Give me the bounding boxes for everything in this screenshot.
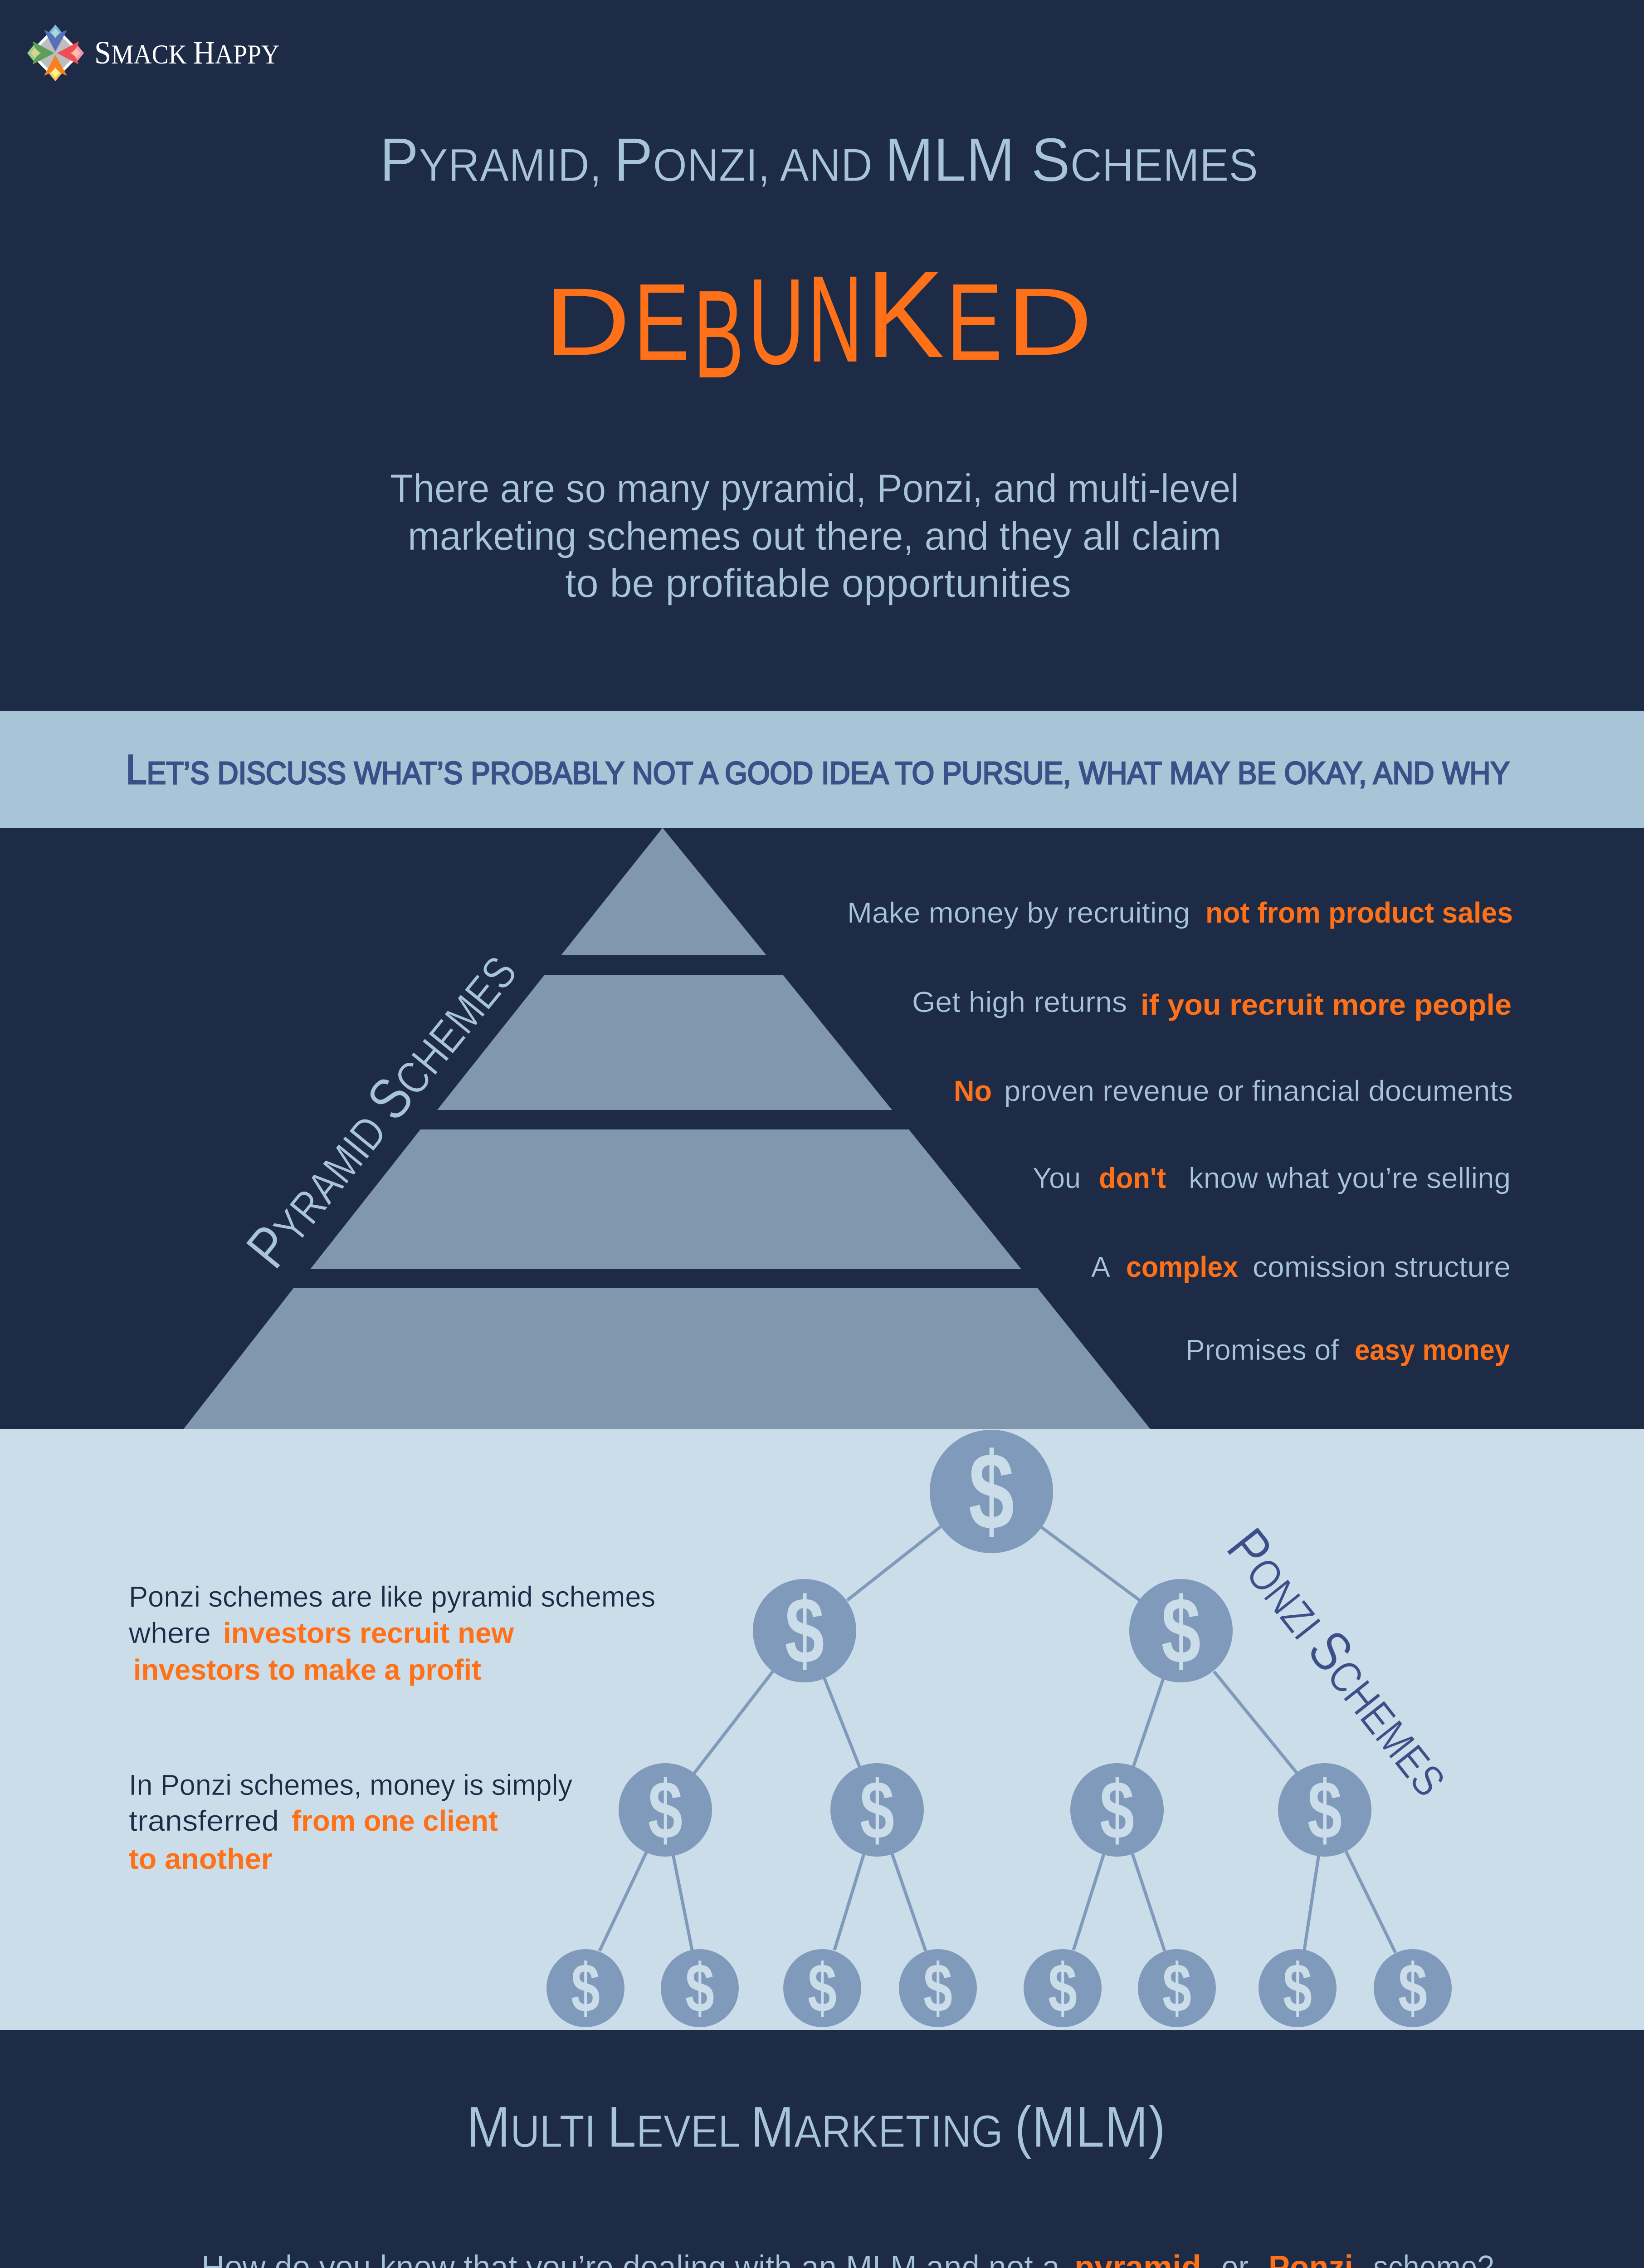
headline: DEBUNKED: N <box>808 250 863 388</box>
text: money transfer: In Ponzi schemes, money is simply <box>129 1769 572 1801</box>
pyramid warning signs <box>847 896 1513 1366</box>
sign: don't know product <box>1033 1162 1511 1194</box>
banner heading: LET’S DISCUSS WHAT’S PROBABLY NOT A GOOD IDEA TO PURSUE, WHAT MAY BE OKAY, AND WHY <box>126 747 1510 793</box>
intro text: marketing schemes out there, and they all claim <box>408 513 1221 558</box>
icon: level four dollar coins: $ <box>1048 1950 1077 2027</box>
sign: high returns: if you recruit more people <box>1141 988 1512 1021</box>
icon: level four dollar coins: $ <box>1162 1950 1191 2027</box>
sign: easy money: Promises of <box>1185 1334 1339 1366</box>
sign: easy money <box>1185 1334 1510 1366</box>
intro text: There are so many pyramid, Ponzi, and multi-level <box>390 466 1239 511</box>
icon: level three dollar coins: $ <box>648 1764 683 1856</box>
headline: DEBUNKED: D <box>544 268 630 375</box>
icon: level four dollar coins: $ <box>923 1950 952 2027</box>
headline: DEBUNKED: U <box>748 254 805 390</box>
icon: level two dollar coins <box>753 1578 1233 1683</box>
icon: level four dollar coins: $ <box>685 1950 714 2027</box>
sign: high returns <box>912 986 1512 1021</box>
text: money transfer: transferred <box>129 1804 279 1837</box>
headline: DEBUNKED: E <box>634 261 689 383</box>
sign: complex commission: A <box>1091 1251 1110 1283</box>
sign: not from product sales: Make money by recruiting <box>847 896 1190 929</box>
sign: don't know product: You <box>1033 1162 1081 1194</box>
sign: complex commission: comission structure <box>1253 1251 1511 1283</box>
intro text <box>390 466 1239 606</box>
icon: root dollar coin: $ <box>969 1430 1014 1553</box>
icon: logo diamond <box>27 24 84 81</box>
icon: level four dollar coins: $ <box>1398 1950 1427 2027</box>
icon: level three dollar coins <box>619 1763 1371 1857</box>
sign: complex commission: complex <box>1126 1251 1238 1283</box>
icon: level four dollar coins: $ <box>808 1950 837 2027</box>
headline: DEBUNKED: B <box>693 264 744 404</box>
headline: DEBUNKED <box>544 245 1093 404</box>
text: money transfer <box>129 1769 572 1875</box>
sign: high returns: Get high returns <box>912 986 1127 1018</box>
sign: don't know product: know what you’re selling <box>1189 1162 1511 1194</box>
label: Ponzi schemes: PONZI SCHEMES <box>1215 1516 1464 1807</box>
panel: discussion banner <box>0 711 1644 828</box>
logo: Smack Happy <box>27 24 279 81</box>
text: Ponzi definition <box>128 1580 655 1686</box>
sign: easy money: easy money <box>1355 1334 1510 1366</box>
headline: DEBUNKED: D <box>1006 268 1093 375</box>
sign: not from product sales <box>847 896 1513 929</box>
icon: level four dollar coins: $ <box>1283 1950 1312 2027</box>
money tree connectors <box>600 1526 1395 1953</box>
headline: DEBUNKED: K <box>866 245 944 383</box>
text: Ponzi definition: investors recruit new <box>223 1617 514 1649</box>
icon: level four dollar coins: $ <box>571 1950 600 2027</box>
intro text: to be profitable opportunities <box>565 561 1071 606</box>
sign: no proven revenue: No <box>954 1075 992 1107</box>
headline: DEBUNKED: E <box>946 261 1002 383</box>
label: pyramid schemes: PYRAMID SCHEMES <box>234 939 529 1280</box>
icon: level two dollar coins: $ <box>785 1578 824 1683</box>
pyramid chart <box>184 828 1150 1429</box>
text: money transfer: from one client <box>292 1804 498 1837</box>
icon: root dollar coin <box>930 1430 1053 1553</box>
text: Ponzi definition: Ponzi schemes are like pyramid schemes <box>129 1580 655 1613</box>
icon: level four dollar coins <box>546 1949 1452 2027</box>
sign: don't know product: don't <box>1099 1162 1166 1194</box>
icon: level three dollar coins: $ <box>1100 1764 1134 1856</box>
sign: not from product sales: not from product sales <box>1205 896 1513 929</box>
text: money transfer: to another <box>129 1843 273 1875</box>
panel: Ponzi schemes <box>0 1429 1644 2030</box>
icon: level three dollar coins: $ <box>1307 1764 1342 1856</box>
title: PYRAMID, PONZI, AND MLM SCHEMES <box>380 125 1258 194</box>
heading: Multi Level Marketing: MULTI LEVEL MARKETING (MLM) <box>467 2095 1166 2160</box>
text: Ponzi definition: where <box>128 1617 211 1649</box>
question text <box>201 2248 1494 2268</box>
sign: no proven revenue: proven revenue or financial documents <box>1004 1075 1513 1107</box>
icon: level two dollar coins: $ <box>1161 1578 1201 1683</box>
icon: level three dollar coins: $ <box>860 1764 894 1856</box>
text: Ponzi definition: investors to make a profit <box>133 1653 481 1686</box>
sign: complex commission <box>1091 1251 1511 1283</box>
logo wordmark: SMACK HAPPY <box>94 34 279 71</box>
